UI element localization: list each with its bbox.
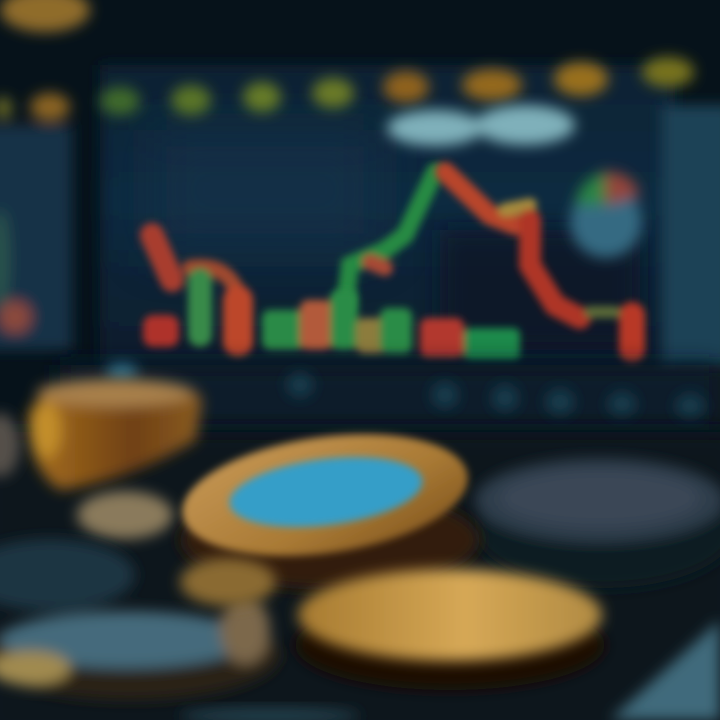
chart header markers	[100, 57, 694, 115]
top left gold tab	[0, 0, 90, 32]
icon: front gold coin	[295, 569, 605, 690]
table surface	[0, 432, 720, 720]
panel: right screen edge	[662, 105, 720, 365]
icon: central gold coin with blue face	[174, 418, 480, 606]
icon: small pale coin	[77, 491, 173, 539]
line chart: left red curve	[152, 235, 240, 342]
pie chart	[570, 172, 642, 258]
bar chart: bottom row	[143, 290, 520, 360]
icon: far-left coin edge	[0, 413, 20, 477]
bottom centre highlight	[180, 707, 360, 720]
callout: pale label	[387, 105, 575, 146]
icon: back-left gold coin	[28, 379, 202, 490]
panel: bottom-right pale corner	[610, 620, 720, 720]
icon: bottom-left blue coins	[0, 539, 280, 700]
line chart: red fall	[445, 172, 632, 350]
lower screen bezel	[60, 363, 720, 430]
line chart: green rise	[345, 172, 435, 305]
panel: left screen	[0, 93, 72, 350]
panel: main chart screen	[100, 65, 720, 365]
icon: right grey coin	[475, 458, 720, 588]
